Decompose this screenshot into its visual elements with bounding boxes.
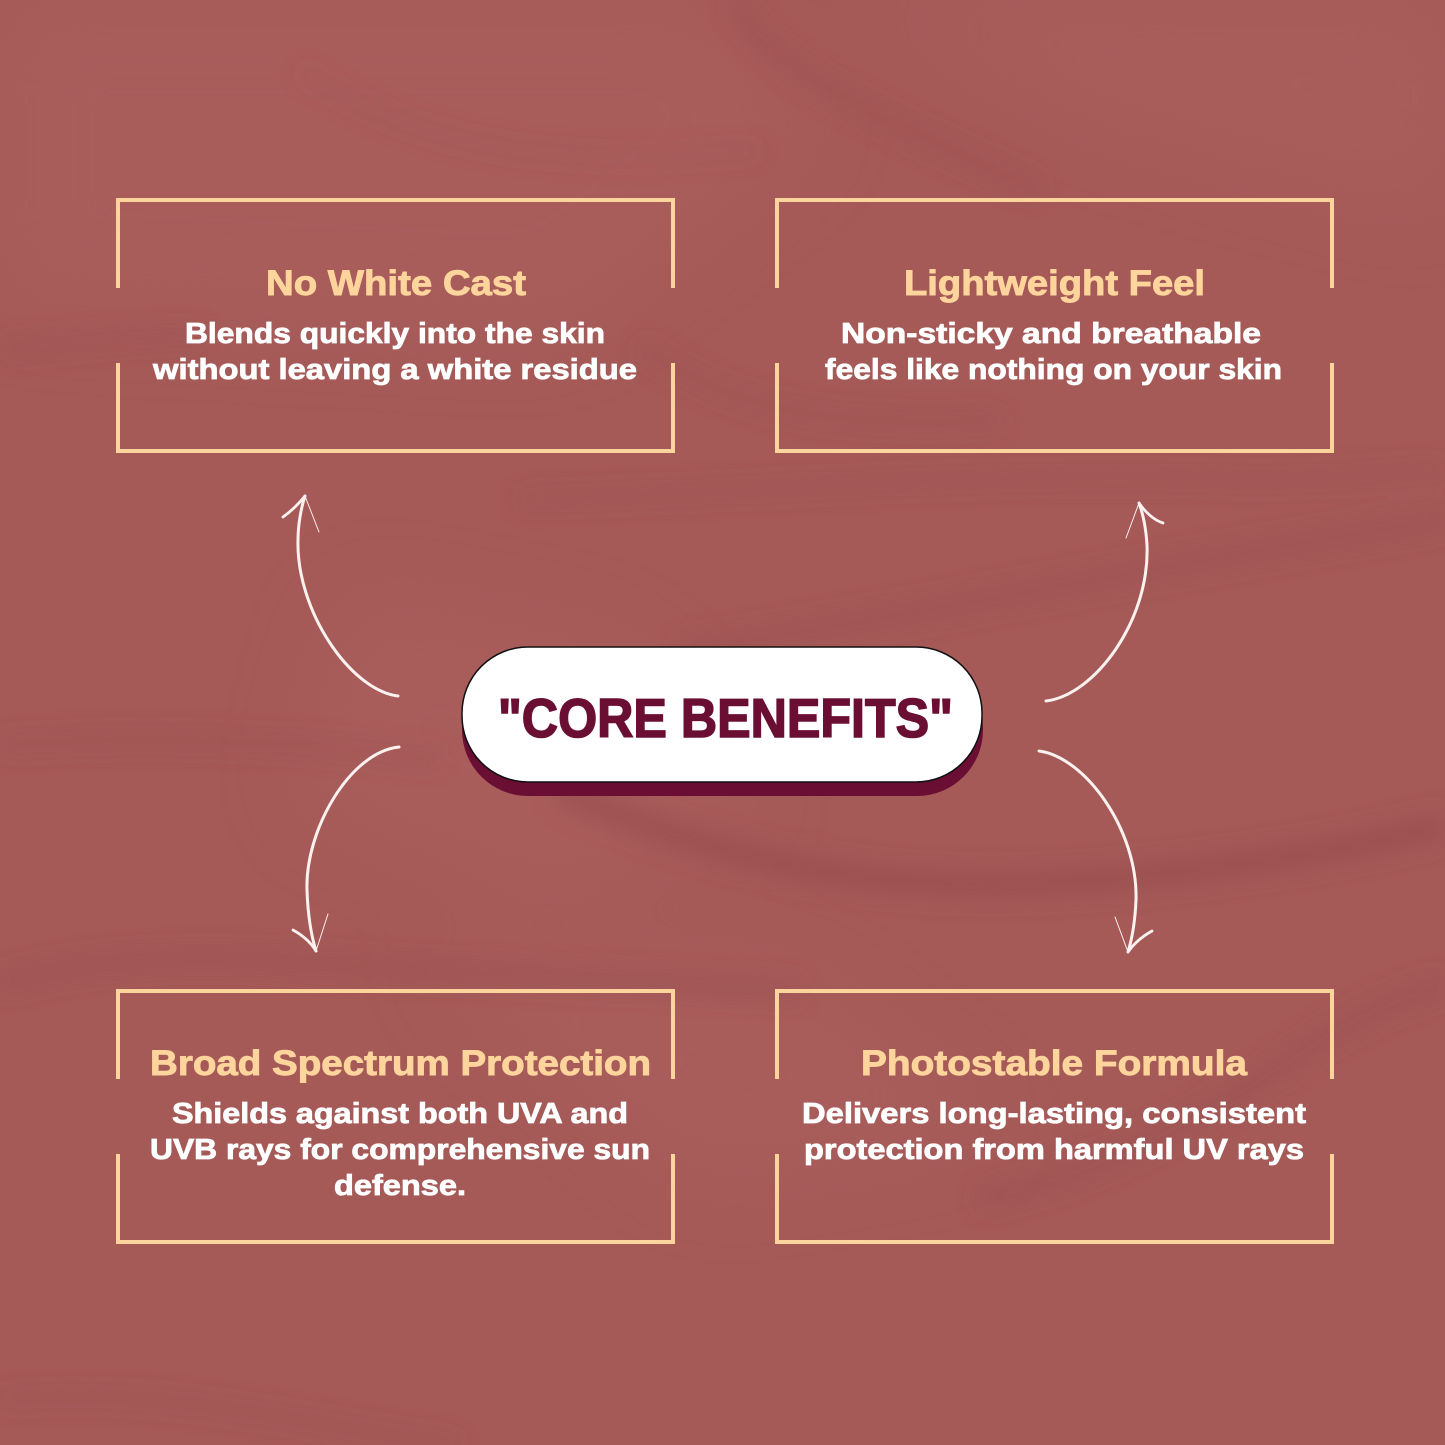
- central badge: core benefits: [462, 647, 983, 796]
- description: without leaving a white residue: [152, 354, 637, 386]
- panel: Lightweight Feel: [777, 200, 1332, 451]
- arrow: to Lightweight Feel: [1046, 503, 1163, 701]
- heading: No White Cast: No White Cast: [266, 264, 526, 303]
- heading: Photostable Formula: Photostable Formula: [861, 1044, 1248, 1083]
- badge title: "CORE BENEFITS": [498, 687, 953, 749]
- description: defense.: [334, 1170, 466, 1202]
- arrow: to Photostable Formula: [1039, 751, 1152, 952]
- description: [802, 1098, 1306, 1166]
- heading: Broad Spectrum Protection: Broad Spectrum Protection: [150, 1044, 651, 1083]
- panel: Broad Spectrum Protection: [118, 991, 673, 1242]
- description: Non-sticky and breathable: [841, 318, 1261, 350]
- panel: No White Cast: [118, 200, 673, 451]
- arrow: to Broad Spectrum Protection: [293, 747, 399, 951]
- heading: Lightweight Feel: Lightweight Feel: [904, 264, 1205, 303]
- arrow: to No White Cast: [283, 496, 398, 696]
- badge shadow: [462, 661, 983, 796]
- panel frame: [777, 991, 1332, 1242]
- panel frame: [118, 200, 673, 451]
- description: protection from harmful UV rays: [804, 1134, 1304, 1166]
- description: UVB rays for comprehensive sun: [150, 1134, 650, 1166]
- description: Delivers long-lasting, consistent: [802, 1098, 1306, 1130]
- panel frame: [777, 200, 1332, 451]
- description: Shields against both UVA and: [172, 1098, 628, 1130]
- badge pill: [462, 647, 982, 782]
- description: [825, 318, 1282, 386]
- description: [152, 318, 637, 386]
- description: Blends quickly into the skin: [185, 318, 605, 350]
- description: [150, 1098, 650, 1202]
- description: feels like nothing on your skin: [825, 354, 1282, 386]
- panel: Photostable Formula: [777, 991, 1332, 1242]
- panel frame: [118, 991, 673, 1242]
